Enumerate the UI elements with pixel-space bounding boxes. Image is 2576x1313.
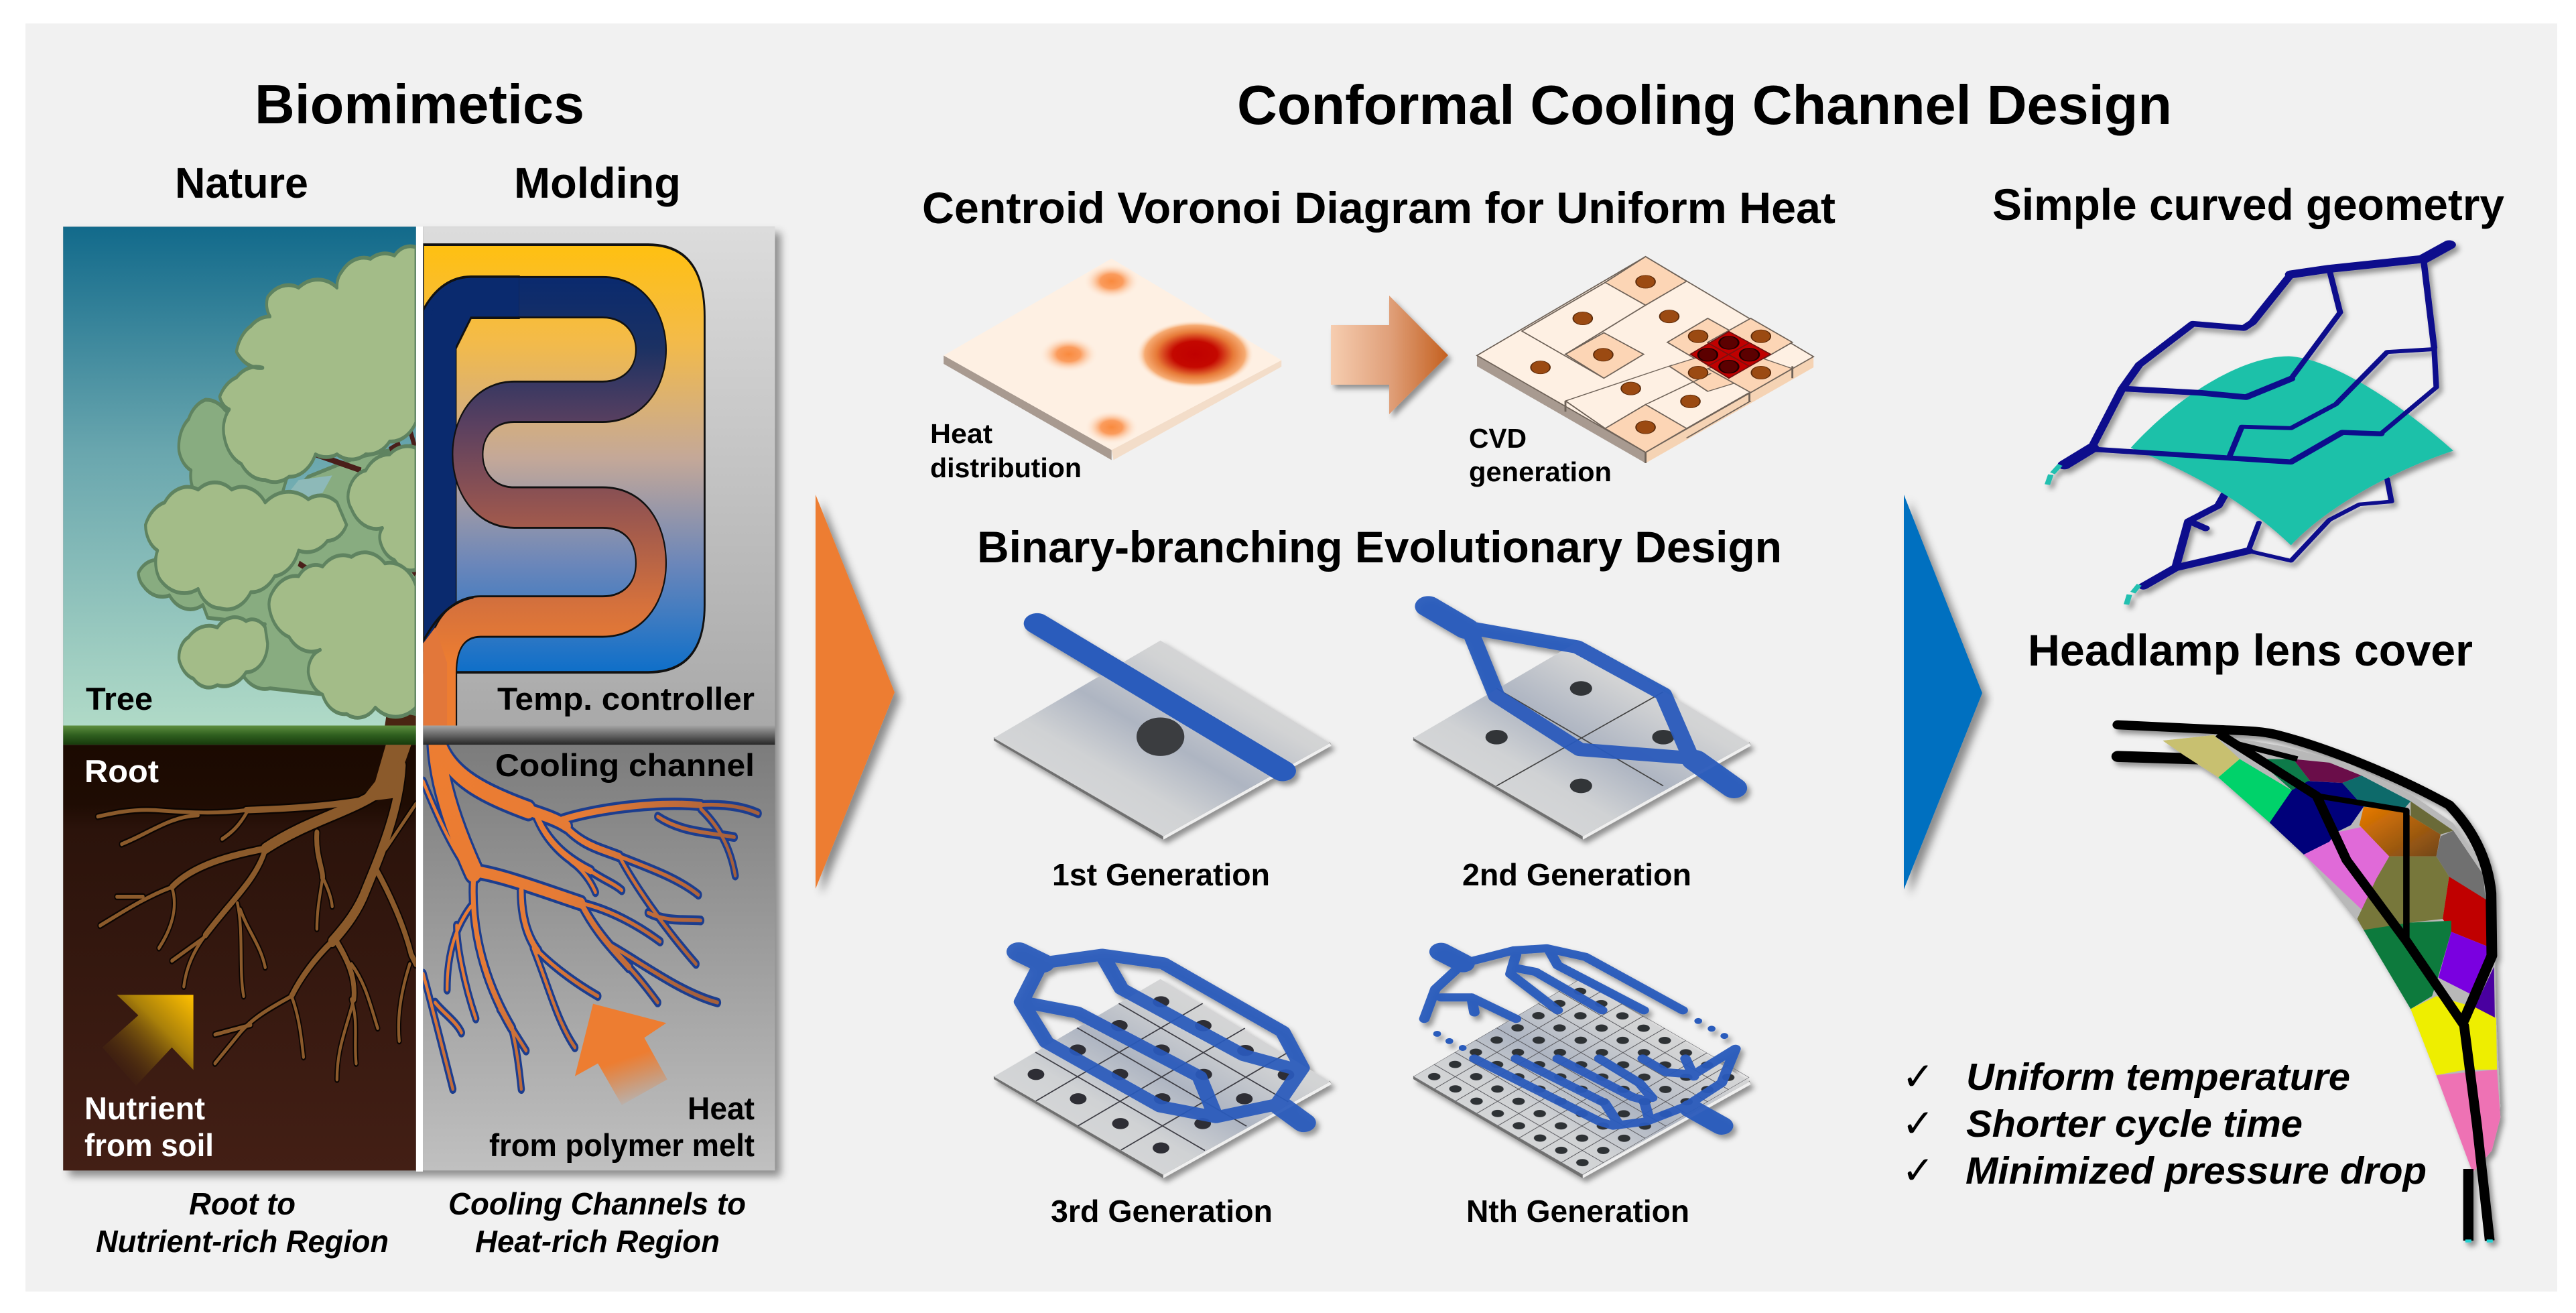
icon: temperature controller xyxy=(423,245,704,733)
diagram: 1st generation xyxy=(994,623,1332,840)
heading: Headlamp lens cover: Headlamp lens cover xyxy=(2028,625,2473,675)
label: Heat distribution: distribution xyxy=(930,452,1082,483)
caption: Root to Nutrient-rich Region: Nutrient-rich Region xyxy=(96,1224,389,1259)
arrow: blue chevron xyxy=(1904,495,1982,889)
heading: Molding: Molding xyxy=(514,159,681,207)
arrow: orange chevron xyxy=(816,495,895,889)
caption: Cooling Channels to Heat-rich Region: Heat-rich Region xyxy=(475,1224,720,1259)
diagram: heat distribution plate xyxy=(944,259,1281,460)
label: Root: Root xyxy=(84,753,159,789)
label: Nutrient from soil: Nutrient xyxy=(84,1090,205,1126)
heading: Simple curved geometry: Simple curved geometry xyxy=(1992,180,2504,229)
divider: white gap xyxy=(416,227,423,1172)
icon: heat arrow xyxy=(575,1004,667,1105)
label: Temp. controller: Temp. controller xyxy=(497,681,755,716)
panel: nature versus molding xyxy=(63,227,775,1172)
label: Heat distribution: Heat xyxy=(930,418,992,449)
title: Conformal Cooling Channel Design: Conformal Cooling Channel Design xyxy=(1237,74,2172,136)
label: 3rd Generation: 3rd Generation xyxy=(1051,1194,1273,1229)
title: Biomimetics: Biomimetics xyxy=(255,73,584,135)
panel: molding controller and cooling channel xyxy=(423,227,775,1170)
heading: Binary-branching Evolutionary Design: Binary-branching Evolutionary Design xyxy=(977,522,1782,572)
heading: Nature: Nature xyxy=(175,159,308,207)
label: CVD generation: CVD xyxy=(1469,423,1527,454)
label: Nth Generation: Nth Generation xyxy=(1466,1194,1689,1229)
caption: Cooling Channels to Heat-rich Region: Cooling Channels to xyxy=(448,1186,746,1221)
label: 2nd Generation: 2nd Generation xyxy=(1462,857,1691,892)
label: Nutrient from soil: from soil xyxy=(84,1127,214,1163)
label: Heat from polymer melt: from polymer melt xyxy=(489,1127,755,1163)
icon: nature roots xyxy=(98,745,416,1080)
icon: cooling channel roots xyxy=(423,740,758,1089)
arrow: heat to CVD xyxy=(1331,296,1448,414)
label: Tree: Tree xyxy=(86,681,153,716)
item: Minimized pressure drop: Minimized pressure drop xyxy=(1966,1149,2427,1192)
item: Shorter cycle time: Shorter cycle time xyxy=(1966,1103,2303,1145)
diagram: 3rd generation xyxy=(994,952,1332,1178)
label: Cooling channel: Cooling channel xyxy=(495,747,755,783)
icon: tree xyxy=(138,246,416,725)
diagram: CVD plate xyxy=(1477,257,1813,463)
check: Shorter cycle time: ✓ xyxy=(1902,1101,1935,1146)
panel: nature tree and roots xyxy=(63,227,416,1170)
icon: nutrient arrow xyxy=(103,995,194,1086)
diagram: simple curved geometry channels xyxy=(2047,245,2453,605)
check: Uniform temperature: ✓ xyxy=(1902,1054,1935,1099)
check: Minimized pressure drop: ✓ xyxy=(1902,1147,1935,1193)
label: 1st Generation: 1st Generation xyxy=(1052,857,1270,892)
diagram: 2nd generation xyxy=(1413,607,1751,840)
diagram: Nth generation xyxy=(1413,948,1751,1178)
label: Heat from polymer melt: Heat xyxy=(688,1090,755,1126)
caption: Root to Nutrient-rich Region: Root to xyxy=(189,1186,296,1221)
diagram: headlamp lens with channels xyxy=(2118,725,2500,1243)
label: CVD generation: generation xyxy=(1469,456,1612,487)
item: Uniform temperature: Uniform temperature xyxy=(1966,1056,2350,1099)
checklist xyxy=(1902,1054,2427,1193)
heading: Centroid Voronoi Diagram: Centroid Voronoi Diagram for Uniform Heat xyxy=(922,183,1836,233)
